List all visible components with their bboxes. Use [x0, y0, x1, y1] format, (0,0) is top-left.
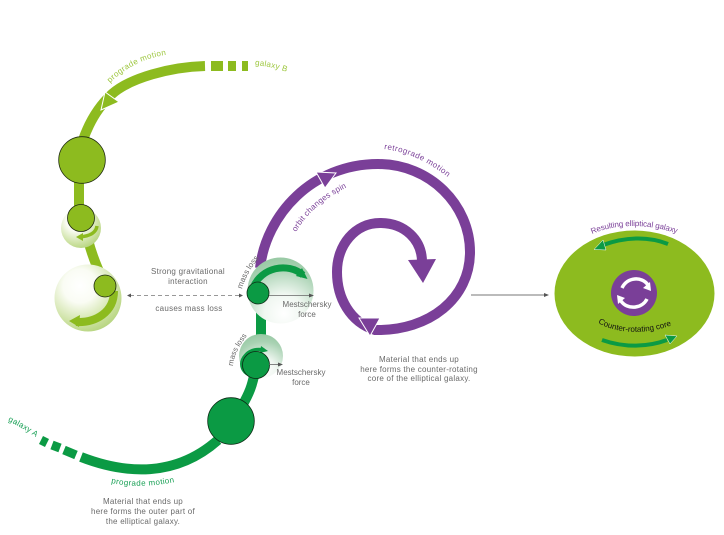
text: counter-rotating note: here forms the counter-rotating — [360, 365, 478, 374]
label: galaxy A: galaxy A — [8, 418, 37, 437]
galaxy B final stage — [54, 264, 122, 332]
galaxy B middle stage — [61, 204, 101, 248]
label: orbit changes spin: orbit changes spin — [293, 184, 346, 232]
label: counter-rotating core: Counter-rotating core — [599, 319, 671, 332]
arrow: inner spiral head — [408, 259, 436, 283]
arrow: outer spiral head — [316, 172, 336, 188]
galaxy A track — [81, 300, 261, 469]
label: galaxy B: galaxy B — [255, 60, 288, 72]
text: Mestschersky force, final: Mestschersky — [283, 300, 331, 309]
text: counter-rotating note: core of the elliptical galaxy. — [368, 374, 470, 383]
text: strong gravitational interaction: interaction — [168, 277, 208, 286]
text: causes mass loss: causes mass loss — [155, 304, 223, 313]
text: Mestschersky force, middle: force — [292, 378, 310, 387]
label: retrograde motion: retrograde motion — [384, 144, 450, 177]
top rotation arrow — [594, 238, 668, 250]
counter-rotating core — [611, 270, 657, 316]
label: mass loss lower: mass loss — [229, 334, 246, 366]
label: mass loss upper: mass loss — [238, 256, 258, 289]
galaxy A middle stage — [239, 334, 283, 378]
resulting elliptical galaxy — [554, 230, 714, 356]
retrograde purple spiral — [260, 164, 470, 330]
galaxy A large circle — [208, 398, 254, 444]
arrow: bottom spiral head — [359, 318, 380, 336]
label: galaxy A prograde motion: prograde motion — [111, 478, 174, 487]
label: resulting elliptical galaxy: Resulting elliptical galaxy — [590, 220, 678, 234]
text: Mestschersky force, middle: Mestschersky — [277, 368, 325, 377]
galaxy B large circle — [59, 137, 105, 183]
galaxy B track — [79, 66, 248, 282]
text: strong gravitational interaction: Strong gravitational — [151, 267, 225, 276]
galaxy A final stage — [247, 258, 314, 324]
text: outer part note: the elliptical galaxy. — [106, 517, 180, 526]
text: outer part note: Material that ends up — [103, 497, 183, 506]
label: galaxy B prograde motion: prograde motion — [108, 50, 166, 84]
galaxy A dashes — [41, 440, 76, 455]
text: counter-rotating note: Material that ends up — [379, 355, 459, 364]
bottom rotation arrow — [602, 335, 677, 346]
dashed double arrow — [127, 294, 243, 298]
Mestschersky force arrow, middle — [269, 362, 283, 366]
text: Mestschersky force, final: force — [298, 310, 316, 319]
icon: rotation arrows — [617, 279, 651, 307]
arrow to result — [471, 293, 549, 297]
Mestschersky force arrow, final — [269, 294, 314, 298]
text: outer part note: here forms the outer part of — [91, 507, 195, 516]
arrow: galaxy B direction — [101, 92, 119, 110]
